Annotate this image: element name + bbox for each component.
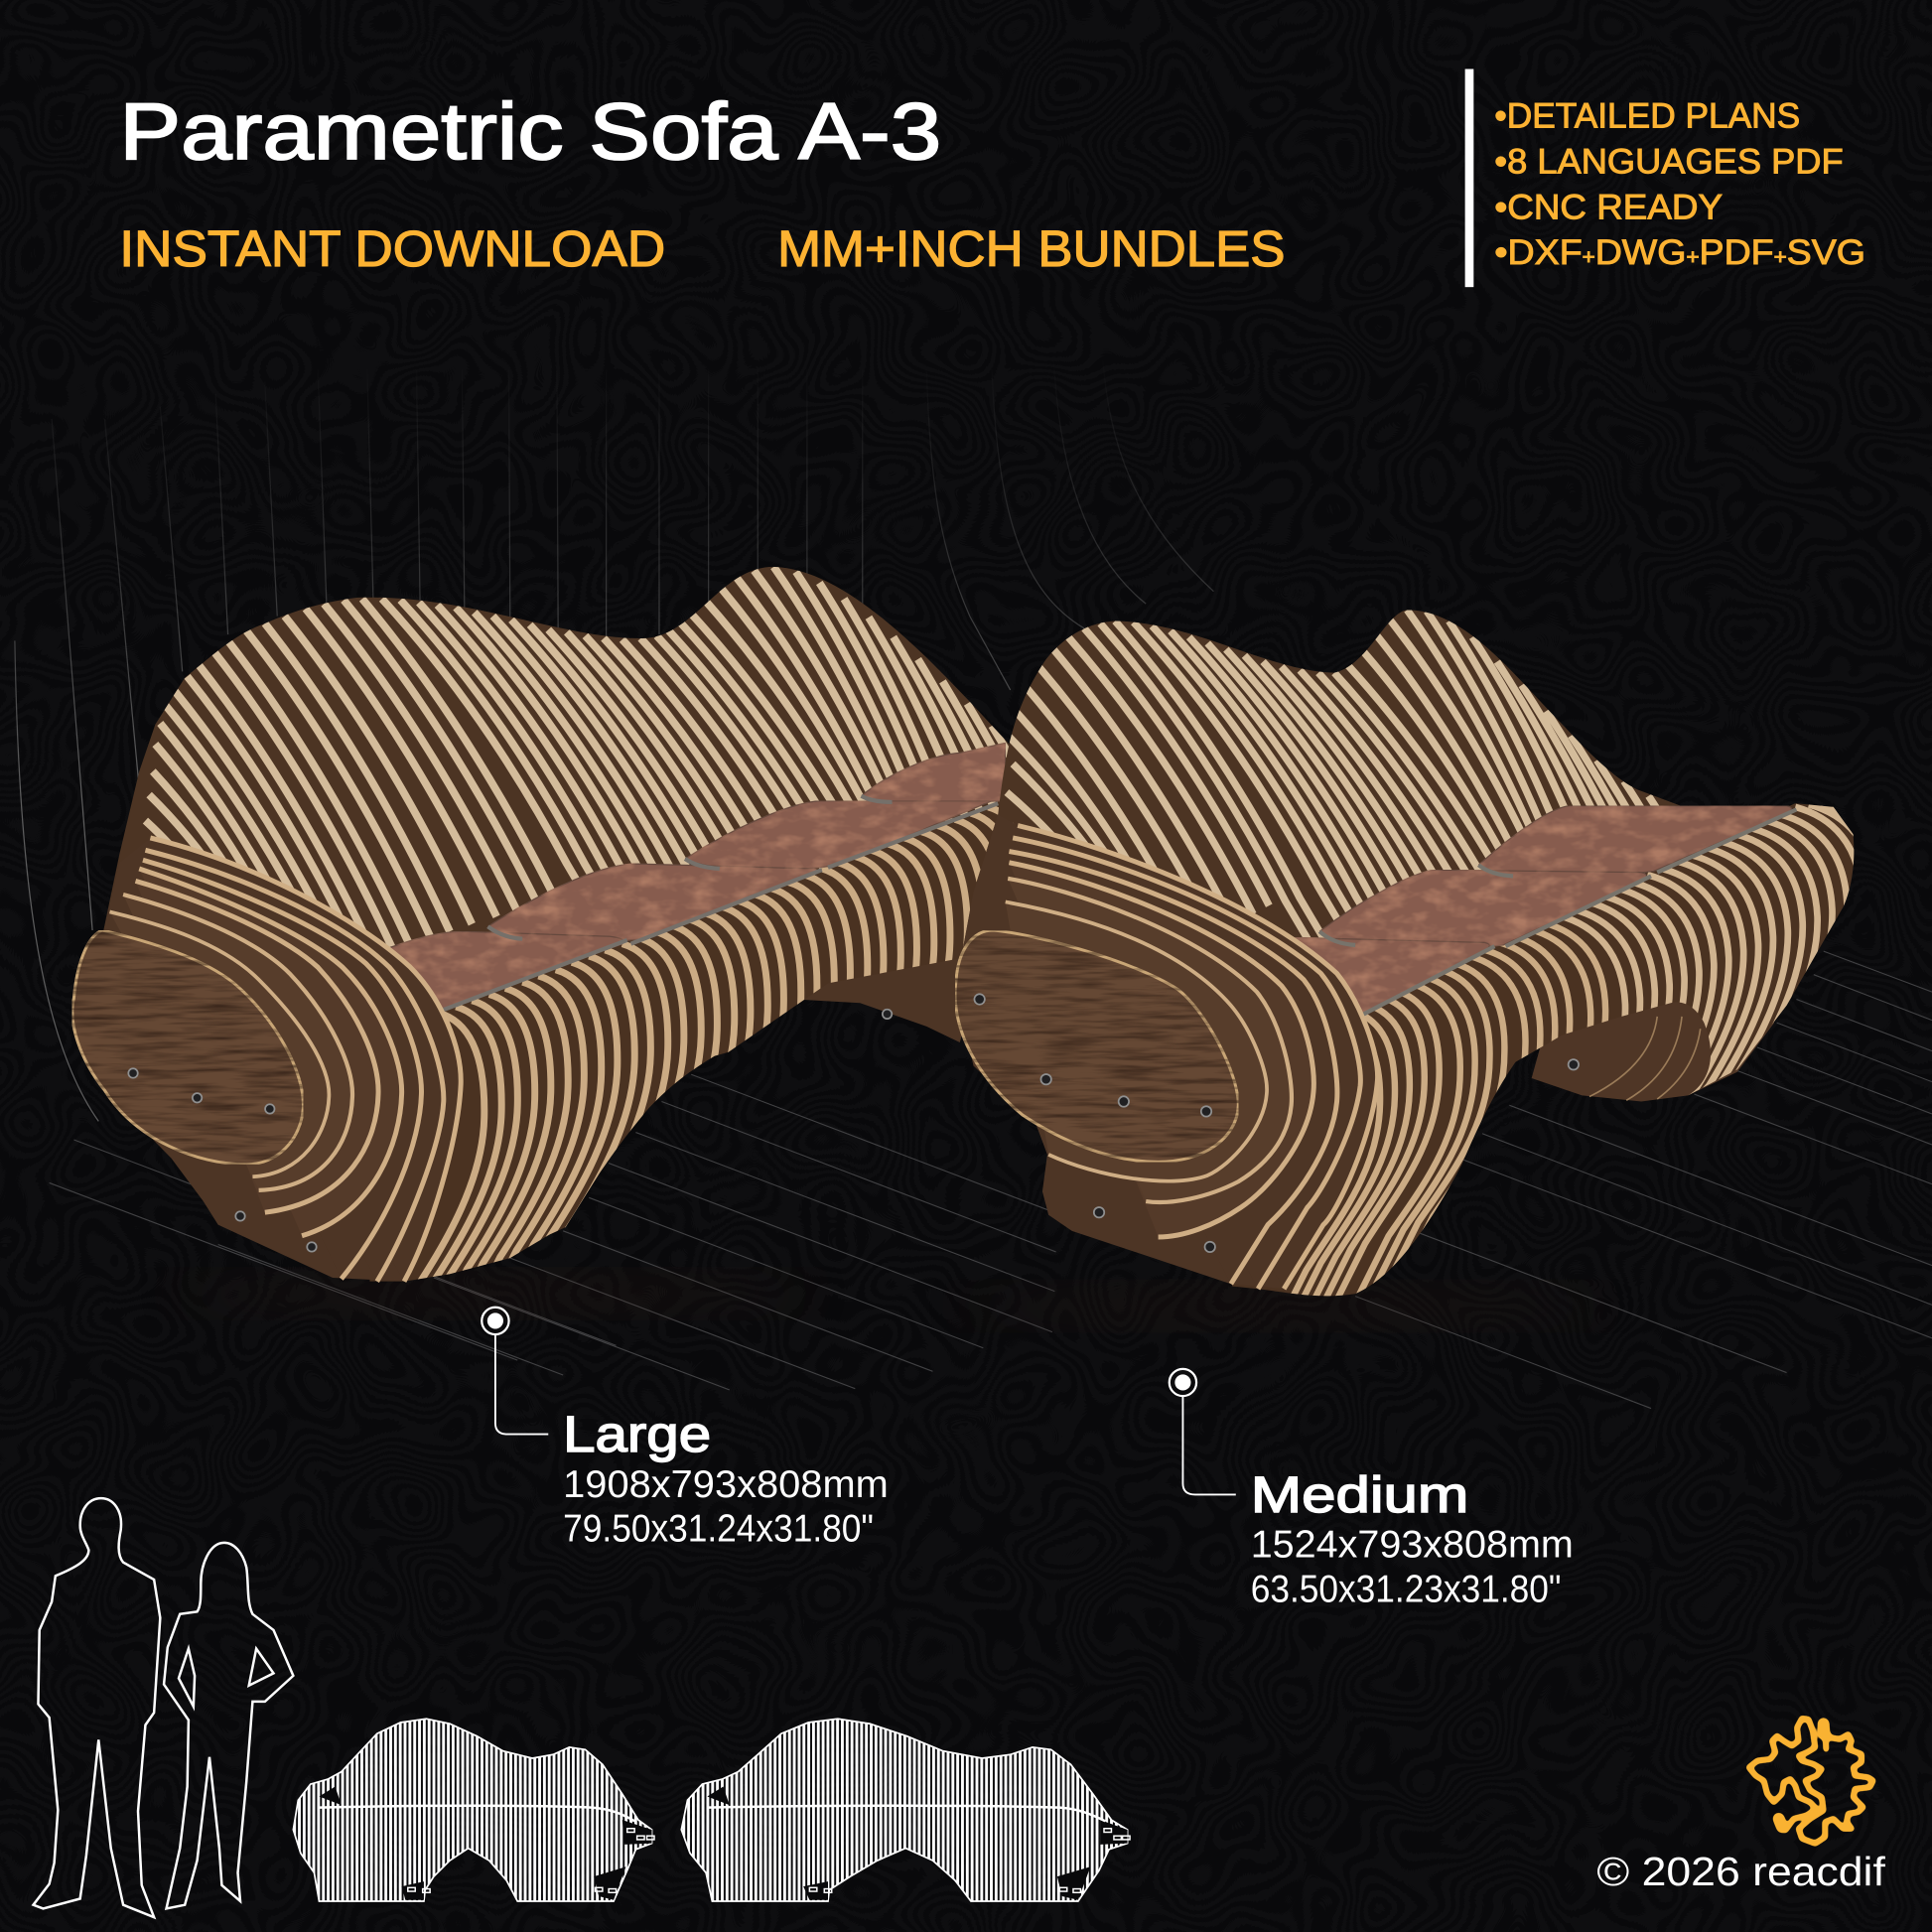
vertical divider bar (1465, 69, 1473, 287)
large sofa backrest ribs (103, 566, 1009, 947)
feature list: •DXF +DWG +PDF +SVG (1494, 233, 1865, 272)
icon: reacdif logo (1749, 1719, 1873, 1844)
large sofa arm end cap (72, 930, 303, 1165)
medium dimensions mm: 1524x793x808mm (1251, 1524, 1574, 1567)
callout: medium (1170, 1369, 1574, 1610)
icon: woman silhouette (164, 1543, 293, 1908)
medium dimensions inch: 63.50x31.23x31.80" (1251, 1568, 1561, 1610)
large marker (482, 1308, 509, 1334)
medium sofa cushions (1226, 806, 1796, 1017)
medium sofa front ribs (1232, 803, 1855, 1297)
medium marker (1170, 1369, 1196, 1396)
large heading: Large (563, 1406, 711, 1462)
large dimensions inch: 79.50x31.24x31.80" (563, 1508, 874, 1551)
large dimensions mm: 1908x793x808mm (563, 1463, 889, 1506)
medium heading: Medium (1251, 1466, 1468, 1523)
large sofa cushions (342, 743, 1006, 1012)
feature list: •DETAILED PLANS (1494, 96, 1800, 135)
callout: large (482, 1308, 889, 1551)
medium sofa backrest ribs (963, 610, 1790, 948)
subtitle: instant download: INSTANT DOWNLOAD (119, 220, 665, 277)
icon: man silhouette (34, 1498, 160, 1917)
large sofa front ribs (369, 805, 999, 1282)
sofa: medium (955, 610, 1855, 1297)
feature list: •8 LANGUAGES PDF (1494, 142, 1844, 181)
large sofa rear leg (794, 949, 986, 1042)
medium leader line (1182, 1396, 1236, 1494)
large sofa bolts (128, 1010, 892, 1252)
copyright: © 2026 reacdif (1596, 1849, 1886, 1894)
title: Parametric Sofa A-3 (119, 87, 941, 177)
blueprint: large sofa side view (291, 1718, 655, 1905)
large sofa arm layers (109, 838, 461, 1282)
medium sofa rear leg (1532, 986, 1774, 1102)
sofa: large (71, 566, 1009, 1283)
subtitle: mm+inch bundles: MM+INCH BUNDLES (777, 220, 1285, 277)
medium sofa arm layers (1006, 826, 1378, 1289)
medium sofa arm base (956, 814, 1378, 1289)
feature list: •CNC READY (1494, 188, 1723, 226)
large sofa arm base (73, 838, 461, 1282)
feature list (1494, 96, 1865, 272)
medium sofa bolts (974, 994, 1579, 1252)
medium sofa arm end cap (955, 930, 1238, 1162)
blueprint: medium sofa side view (679, 1718, 1130, 1905)
large leader line (495, 1334, 548, 1435)
